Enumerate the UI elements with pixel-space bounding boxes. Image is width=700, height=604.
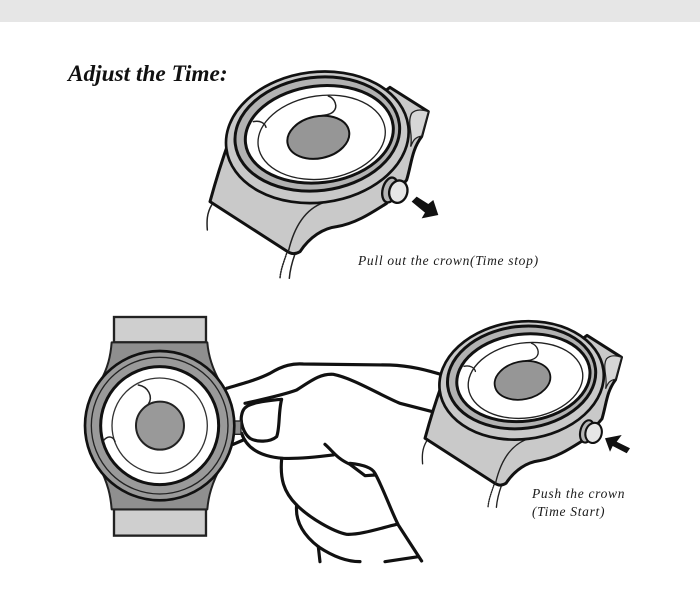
illustration: tilted watch, crown pulled out <box>207 61 438 278</box>
top grey bar <box>0 0 700 22</box>
illustration: tilted watch, crown pushed in <box>422 312 622 507</box>
icon: hand <box>227 364 445 562</box>
caption: push in: (Time Start) <box>532 504 605 519</box>
icon: front watch <box>85 317 241 536</box>
caption: push in <box>532 486 625 519</box>
caption: pull out: Pull out the crown(Time stop) <box>358 253 539 268</box>
arrow: push in <box>605 435 630 453</box>
caption: push in: Push the crown <box>532 486 625 501</box>
illustration: hand pulling crown on front-view watch <box>85 317 445 562</box>
title: Adjust the Time: <box>68 61 228 87</box>
